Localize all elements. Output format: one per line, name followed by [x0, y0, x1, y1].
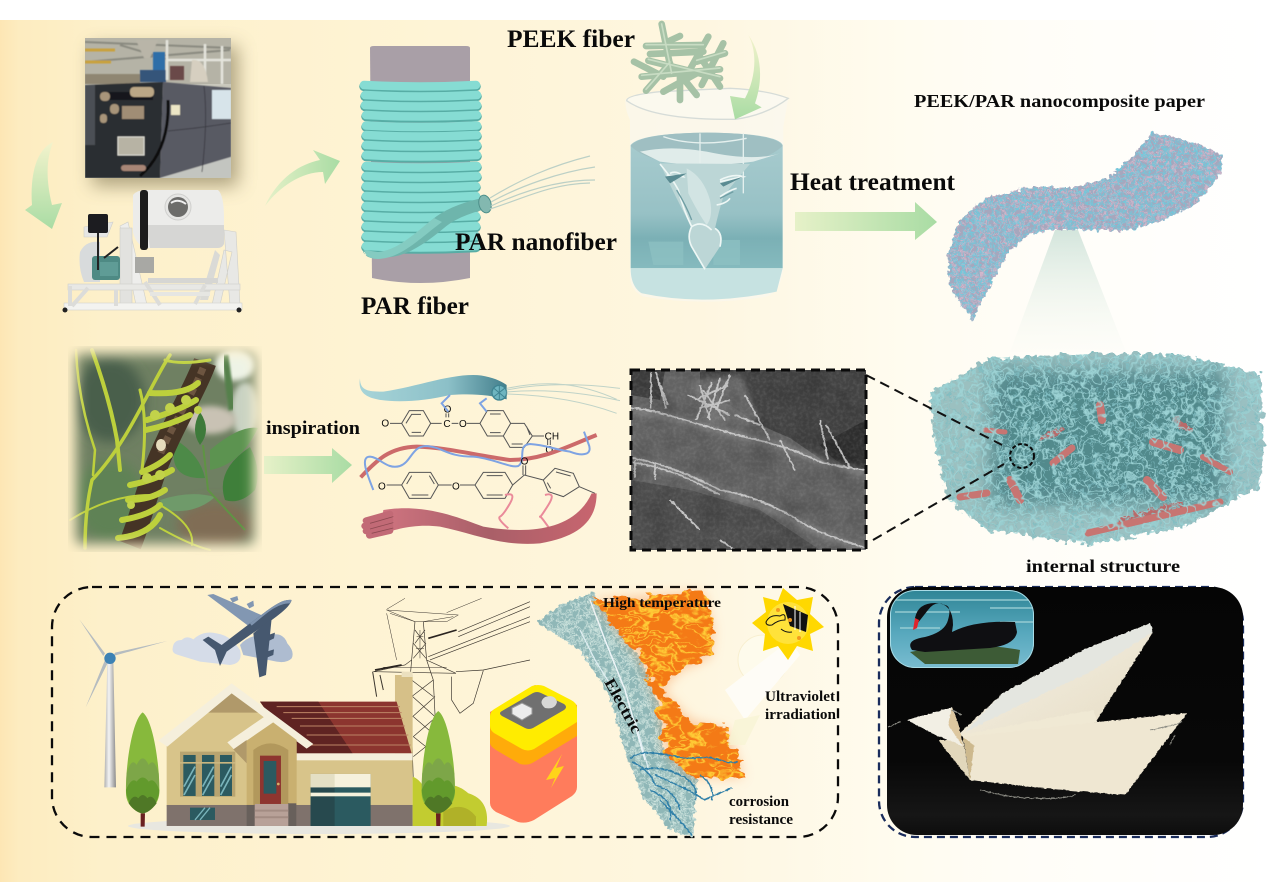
garage wall	[296, 753, 413, 807]
chimney	[395, 675, 413, 755]
zoom circle	[1010, 444, 1034, 468]
PEEK molecule	[387, 465, 595, 498]
red PEEK thread	[361, 435, 597, 477]
icon: right tree	[422, 711, 455, 826]
icon: sun	[752, 588, 824, 660]
icon: wind turbine	[79, 619, 167, 787]
leaves	[160, 355, 258, 530]
label: corrosion resistance	[729, 794, 793, 828]
arrow: inspiration	[264, 448, 352, 483]
PAR molecule	[390, 411, 550, 447]
icon: battery	[490, 685, 577, 823]
heading: internal structure: internal structure	[1026, 556, 1180, 576]
porch gable	[247, 720, 297, 807]
zoom connector lines	[866, 375, 1004, 540]
molecule atoms: C	[443, 419, 451, 430]
red roof	[260, 702, 412, 753]
icon: bushes	[413, 777, 487, 826]
molecule atoms: CH	[545, 431, 559, 442]
host stem	[130, 362, 205, 545]
label: Ultraviolet irradiation: Ultraviolet	[765, 689, 835, 705]
navy dashed frame	[879, 587, 1243, 837]
arrow: mill to fiber	[265, 150, 340, 206]
PAR fiber spool	[363, 46, 595, 283]
beaker with PEEK fibers	[625, 24, 788, 302]
label: corrosion resistance: resistance	[729, 812, 793, 828]
swan inset photo	[890, 590, 1034, 668]
panel border	[52, 587, 838, 837]
nanofiber strands	[490, 156, 595, 209]
vortex	[660, 163, 750, 269]
vine lumps	[127, 395, 202, 509]
icon: cloud	[173, 632, 293, 665]
label: Ultraviolet irradiation	[765, 689, 837, 723]
deep PEEK rods	[1040, 420, 1190, 520]
snail shell	[156, 439, 166, 451]
heading: PAR fiber: PAR fiber	[361, 293, 469, 320]
main wall	[167, 692, 297, 807]
icon: left tree	[126, 712, 159, 827]
windows	[180, 752, 235, 797]
pink PEEK rods	[960, 405, 1230, 533]
loose strand	[363, 197, 492, 258]
fibrils	[631, 372, 866, 550]
ground shadow	[128, 818, 510, 834]
molecule atoms: O	[381, 419, 389, 430]
PAR nanofiber end	[360, 375, 620, 413]
vine photo	[68, 346, 262, 552]
steps	[255, 804, 288, 826]
nanocomposite paper sheet	[940, 125, 1230, 325]
molecule atoms	[378, 456, 529, 493]
garage door	[311, 774, 371, 826]
icon: airplane	[203, 594, 292, 677]
dodder vines	[70, 350, 210, 550]
stone base	[167, 805, 413, 826]
pink hooks	[499, 494, 552, 528]
arrow: photo to mill	[25, 142, 62, 229]
label: corrosion resistance: corrosion	[729, 794, 790, 810]
molecule atoms: O	[545, 445, 553, 456]
ball mill machine	[62, 190, 242, 312]
beaker glass	[625, 88, 788, 302]
molecule atoms: O	[452, 482, 460, 493]
spool cylinder	[370, 46, 470, 283]
molecule atoms	[381, 405, 559, 456]
water	[631, 133, 783, 268]
soft ridges	[631, 410, 866, 550]
photo: spinning machine	[85, 38, 238, 186]
molecular interface diagram	[360, 375, 620, 544]
label: High temperature: High temperature	[603, 596, 721, 611]
door	[260, 756, 281, 804]
heading: nanocomposite paper: PEEK/PAR nanocomposite paper	[914, 91, 1205, 111]
heading: PEEK fiber: PEEK fiber	[507, 25, 635, 53]
icon: flames	[596, 592, 743, 777]
SEM micrograph	[631, 370, 866, 550]
water corrosion threads	[630, 753, 738, 835]
zoom cone	[1010, 230, 1126, 352]
internal structure network	[925, 350, 1269, 550]
arrow: heat treatment	[795, 202, 937, 240]
arrow into beaker	[730, 35, 762, 119]
applications panel	[52, 587, 838, 837]
PEEK fiber end	[365, 493, 597, 544]
black backdrop	[887, 587, 1243, 835]
origami swan	[888, 623, 1187, 799]
stressed fiber strip	[537, 592, 697, 837]
origami swan photo panel	[879, 587, 1243, 837]
molecule atoms: O	[444, 405, 452, 416]
blue interlock thread	[365, 395, 590, 490]
fiber coils	[364, 85, 477, 249]
icon: sun rays	[725, 635, 800, 745]
peek fibers	[634, 24, 725, 100]
label: Ultraviolet irradiation: irradiation	[765, 707, 837, 723]
label: Electric: Electric	[601, 676, 644, 736]
molecule atoms: O	[521, 456, 529, 467]
icon: transmission tower	[373, 598, 530, 780]
icon: house	[158, 672, 413, 826]
molecule atoms: O	[459, 419, 467, 430]
heading: PAR nanofiber: PAR nanofiber	[455, 229, 617, 256]
molecule atoms: O	[378, 482, 386, 493]
gable trim	[158, 683, 313, 749]
heading: inspiration: inspiration	[266, 418, 360, 439]
heading: Heat treatment: Heat treatment	[790, 169, 956, 196]
